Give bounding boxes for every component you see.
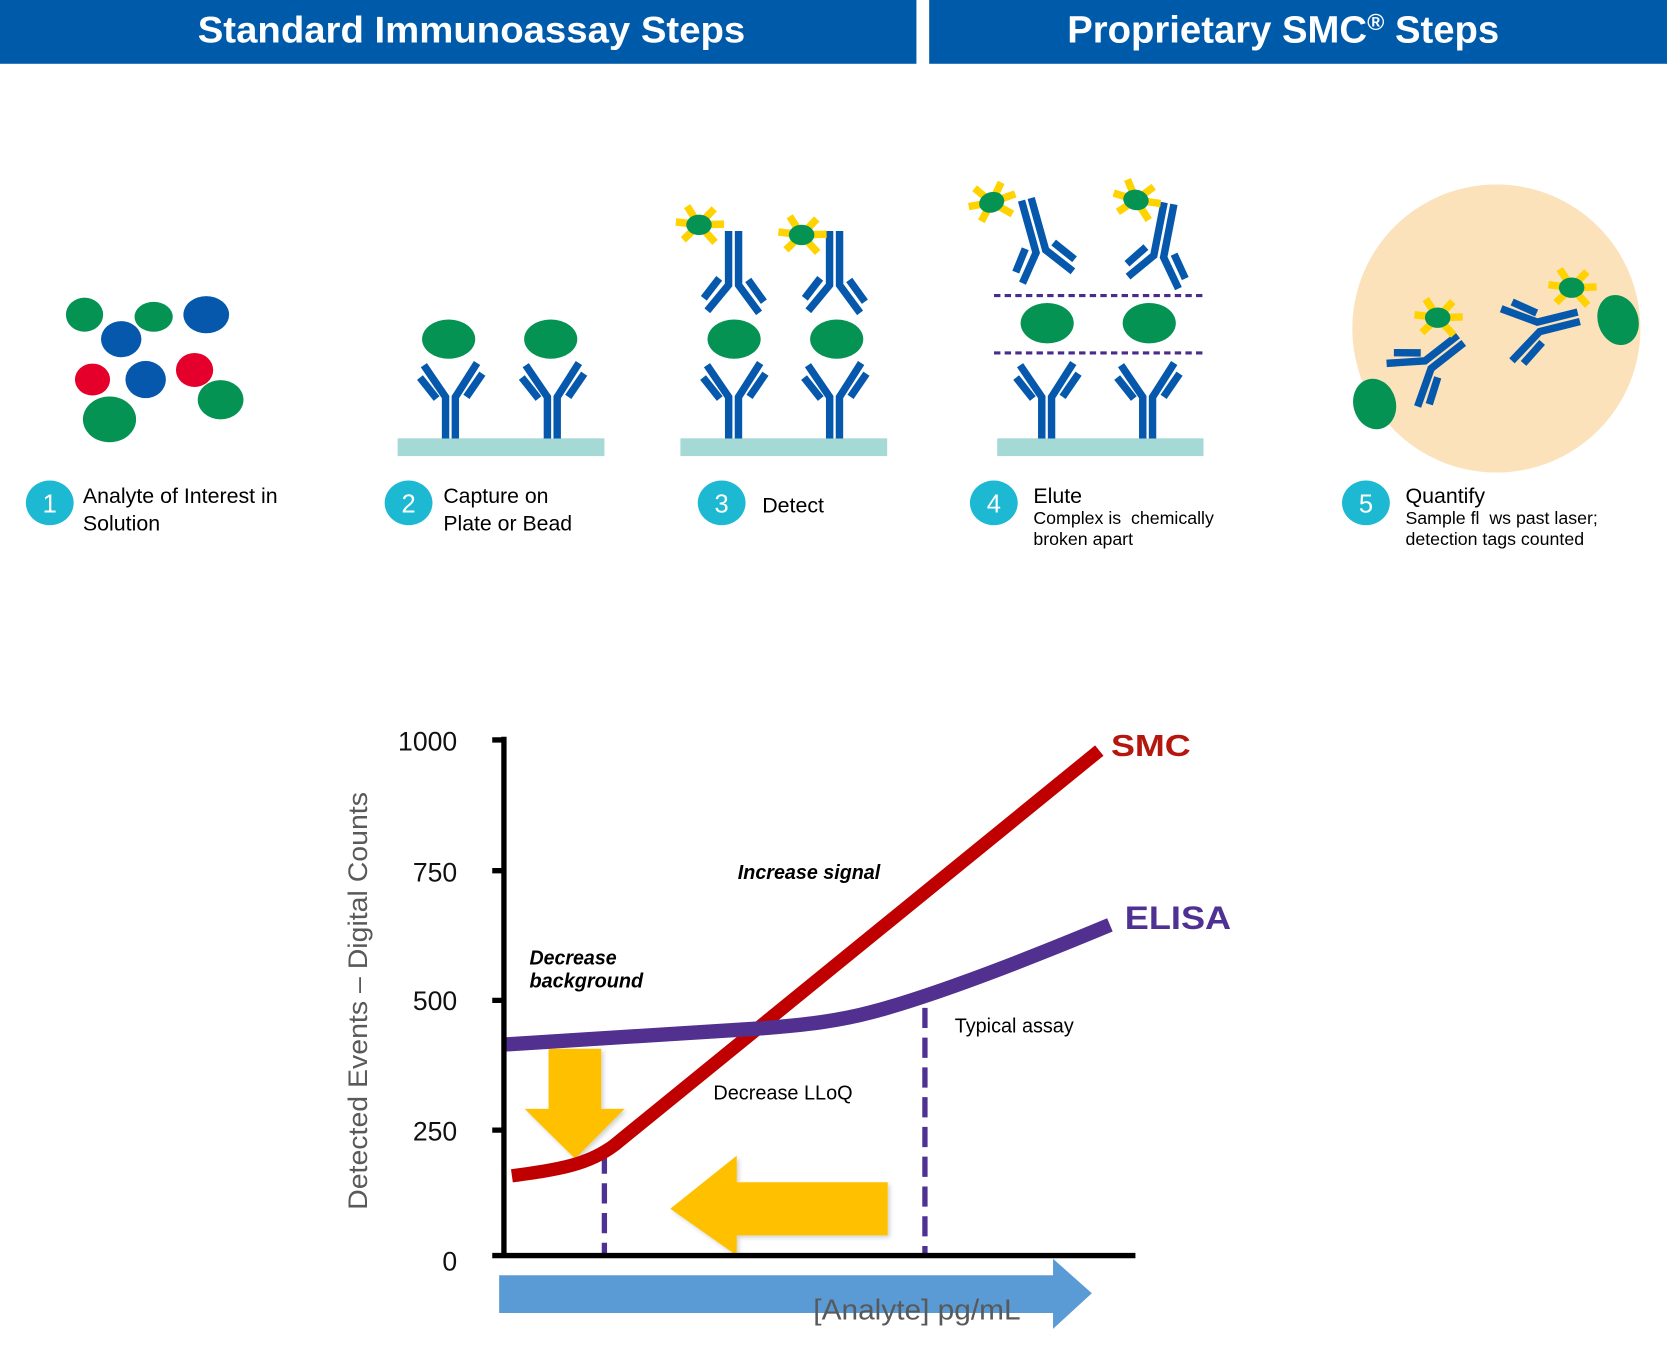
header: Standard Immunoassay Steps [0, 0, 916, 64]
step 5 illustration: quantify [1347, 184, 1645, 473]
ELISA label: ELISA [1125, 900, 1231, 936]
dashed markers [604, 1008, 925, 1254]
annotation: decrease background: background [529, 971, 644, 993]
step 5 label: Sample fl ws past laser; [1405, 508, 1598, 528]
step 2 label: Capture on [443, 484, 548, 508]
SMC label: SMC [1111, 728, 1191, 763]
y-axis title: Detected Events – Digital Counts [343, 792, 373, 1210]
annotation: decrease background [529, 947, 644, 993]
arrow: decrease LLoQ [670, 1156, 888, 1256]
step 5 label: Quantify [1405, 484, 1485, 508]
annotation: decrease background: Decrease [529, 947, 617, 969]
step 3 illustration: detect [676, 206, 887, 456]
step 3 label: Detect [762, 493, 824, 517]
step 4 label [970, 481, 1214, 549]
step 2 label: 2 [401, 490, 416, 518]
axes [492, 737, 1135, 1256]
step 5 label [1342, 481, 1598, 549]
step 5 label: detection tags counted [1405, 529, 1584, 549]
header: Proprietary SMC Steps: Steps [1384, 9, 1499, 52]
step 3 label [698, 481, 824, 525]
step 4 label: 4 [987, 490, 1001, 518]
x-axis arrow: [Analyte] pg/mL [813, 1294, 1021, 1326]
step 1 label [26, 481, 278, 536]
x-axis arrow [499, 1259, 1092, 1329]
chart: detected events vs analyte concentration [343, 727, 1231, 1329]
step 1 illustration: analytes in solution [66, 296, 243, 442]
axis tick labels: 1000 [398, 727, 457, 757]
axis tick labels: 0 [442, 1246, 457, 1276]
axis tick labels [398, 727, 457, 1276]
annotation: typical assay: Typical assay [955, 1015, 1075, 1037]
header: Proprietary SMC Steps: Proprietary SMC [1067, 9, 1367, 52]
step 2 illustration: capture on plate [398, 319, 604, 456]
axis tick labels: 750 [413, 857, 457, 887]
step 2 label: Plate or Bead [443, 512, 572, 536]
ELISA curve [504, 925, 1110, 1045]
header: Proprietary SMC Steps [929, 0, 1667, 64]
step 1 label: Analyte of Interest in [83, 484, 278, 508]
step 5 label: 5 [1359, 490, 1373, 518]
arrow: decrease background [525, 1049, 625, 1159]
step 4 label: Elute [1033, 484, 1082, 508]
step 1 label: Solution [83, 512, 160, 536]
annotation: decrease LLoQ: Decrease LLoQ [713, 1082, 853, 1104]
SMC curve [512, 751, 1099, 1176]
step 4 label: Complex is chemically [1033, 508, 1214, 528]
step 4 illustration: elute [964, 177, 1203, 456]
step 1 label: 1 [43, 490, 57, 518]
step 4 label: broken apart [1033, 529, 1133, 549]
header: Standard Immunoassay Steps: Standard Immunoassay Steps [198, 9, 745, 51]
step 2 label [385, 481, 572, 536]
axis tick labels: 500 [413, 986, 457, 1016]
annotation: increase signal: Increase signal [738, 862, 881, 884]
header: Proprietary SMC Steps: ® [1367, 9, 1384, 35]
axis tick labels: 250 [413, 1117, 457, 1147]
step 3 label: 3 [715, 490, 729, 518]
